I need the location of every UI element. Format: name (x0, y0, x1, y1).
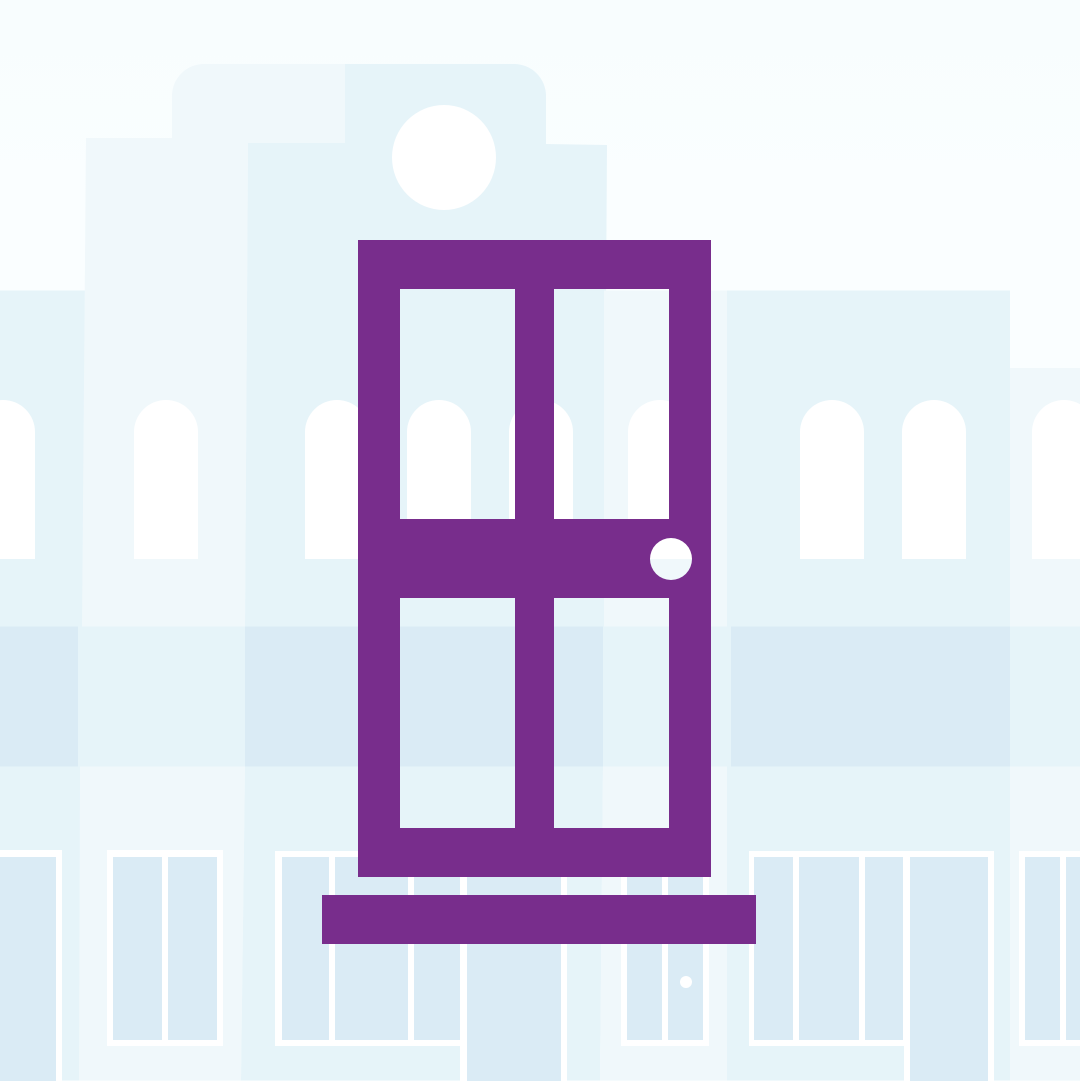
round gable window (392, 105, 496, 210)
building: third, central gable (241, 64, 607, 1080)
shopfront: glazed door with knob (621, 851, 709, 1046)
building: fifth, wide (727, 290, 1010, 1080)
arched upper windows (0, 400, 1080, 559)
shopfront: far right window (1019, 851, 1080, 1046)
shopfront: central window and door (275, 851, 567, 1081)
icon: door step (322, 895, 756, 944)
building: far left (0, 290, 85, 1080)
building: far right (1010, 368, 1080, 1080)
building: second, light with stepped roof (78, 64, 345, 1080)
icon: purple door with see-through panes and knob (358, 240, 711, 877)
shopfront: two-pane window (107, 850, 223, 1046)
shopfront: far left window (0, 850, 62, 1081)
building: fourth, light (600, 290, 731, 1080)
shopfront: right wide window and door (749, 851, 994, 1081)
